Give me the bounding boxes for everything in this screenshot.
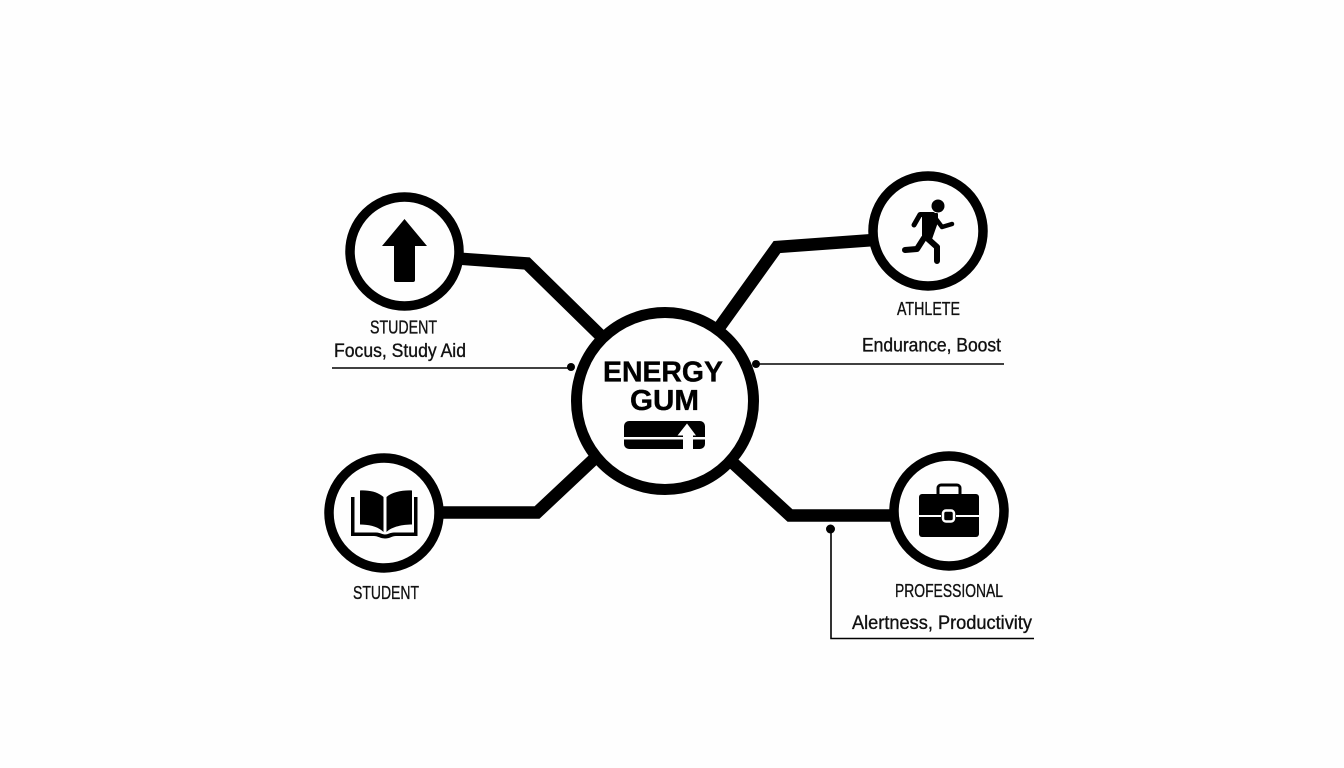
leader line: athlete [752, 360, 1004, 368]
connector: center to athlete node [716, 240, 874, 332]
label: professional [852, 580, 1032, 634]
node: athlete [873, 176, 983, 286]
hub title: GUM [630, 385, 699, 417]
icon: briefcase [919, 485, 979, 537]
hub title [603, 356, 723, 417]
icon: gum stick with up arrow [624, 421, 705, 450]
label: athlete [862, 298, 1002, 356]
central hub: energy gum [576, 312, 754, 490]
label: student focus: Focus, Study Aid [334, 341, 466, 362]
label: student focus: STUDENT [370, 316, 437, 338]
node: professional [894, 456, 1004, 566]
label: professional: PROFESSIONAL [895, 580, 1003, 601]
label: athlete: ATHLETE [897, 298, 960, 319]
label: student book: STUDENT [353, 582, 419, 603]
label: student focus [334, 316, 466, 362]
label: professional: Alertness, Productivity [852, 613, 1032, 634]
node: focus arrow [350, 197, 459, 306]
label: athlete: Endurance, Boost [862, 336, 1002, 356]
icon: up arrow [382, 219, 427, 282]
connector: center to student book node [440, 459, 594, 512]
icon: runner [905, 200, 952, 261]
node: student book [329, 458, 439, 568]
icon: open book [351, 490, 418, 538]
leader line: professional [826, 524, 1034, 638]
leader line: student [332, 363, 575, 371]
connector: center to professional node [733, 463, 894, 516]
connector: center to focus arrow node [460, 259, 602, 337]
hub title: ENERGY [603, 356, 723, 388]
